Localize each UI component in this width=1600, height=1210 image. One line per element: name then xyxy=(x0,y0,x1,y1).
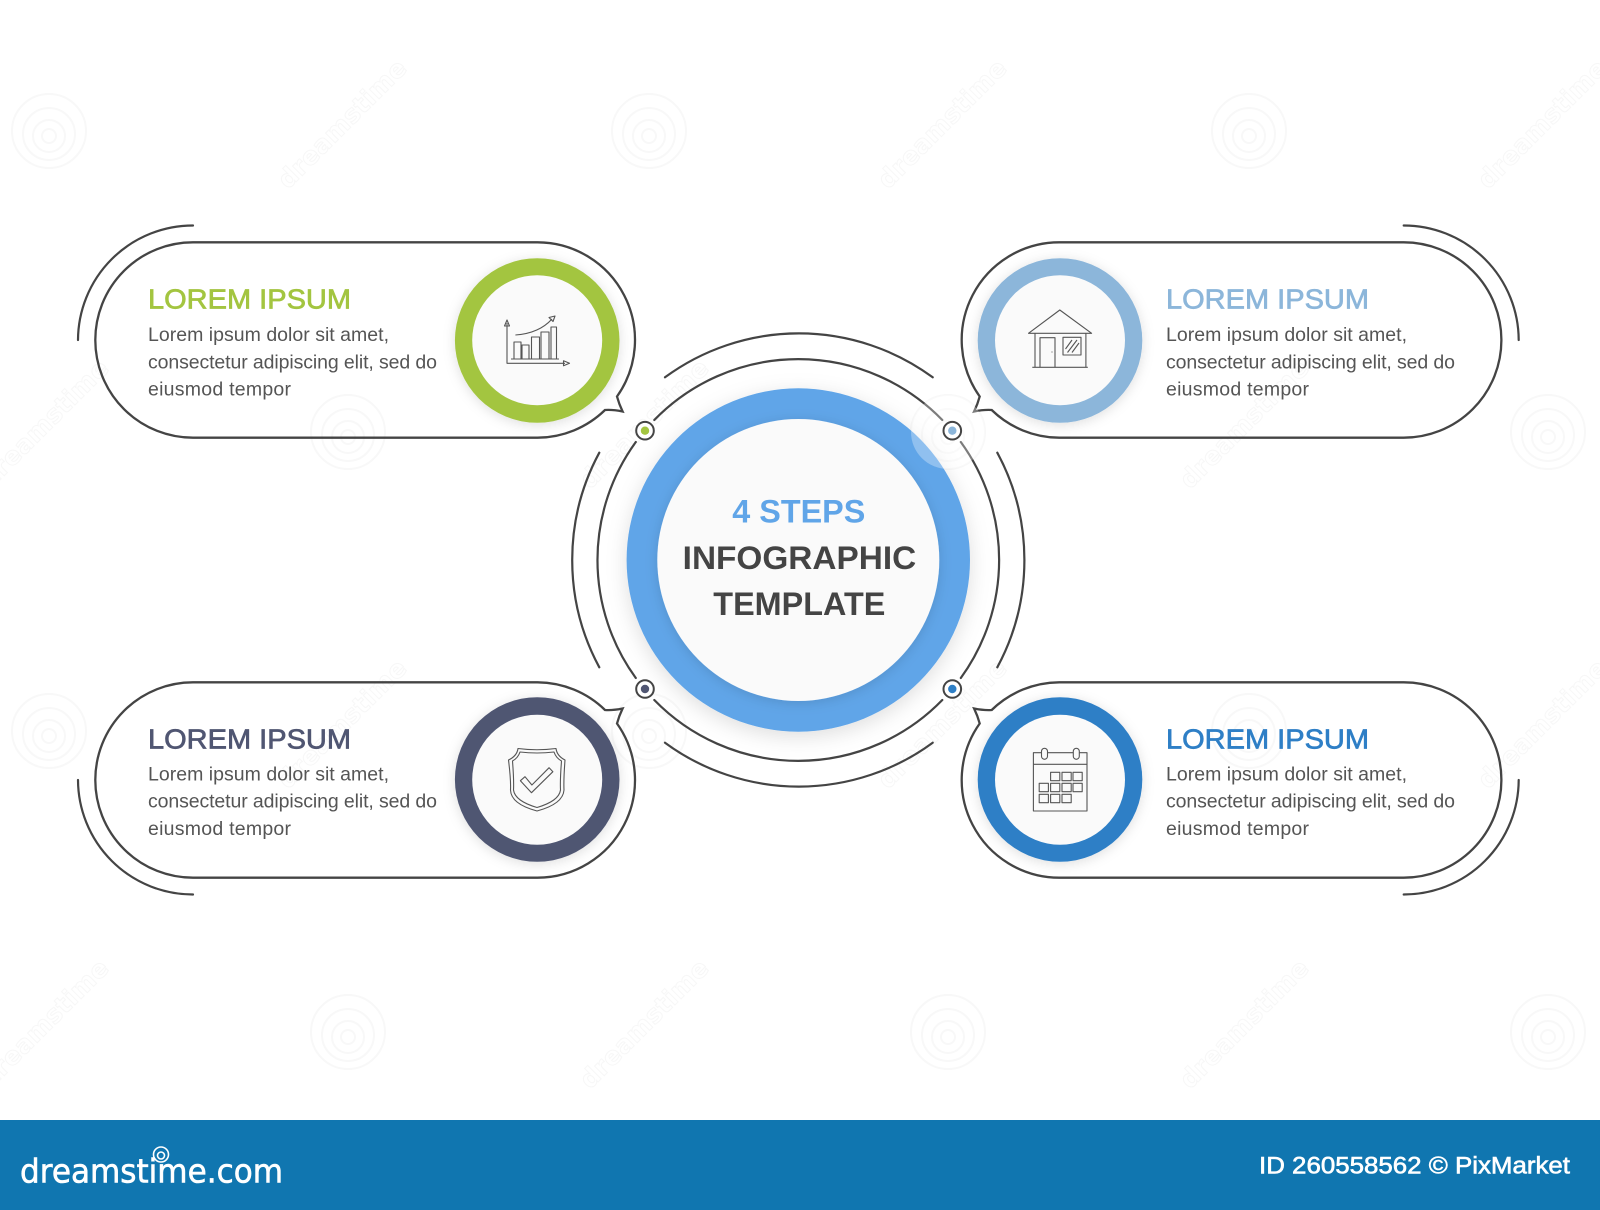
card outline top-left xyxy=(95,242,635,438)
center title: infographic: INFOGRAPHIC xyxy=(683,540,916,576)
node: green xyxy=(636,422,654,440)
panel: bottom-right step xyxy=(962,682,1519,894)
body text: Lorem ipsum dolor sit amet, xyxy=(1166,324,1407,346)
body text: consectetur adipiscing elit, sed do xyxy=(148,351,437,373)
body text: eiusmod tempor xyxy=(1166,818,1310,840)
body text: consectetur adipiscing elit, sed do xyxy=(1166,791,1455,813)
card outline bottom-right xyxy=(962,682,1501,878)
body text xyxy=(1166,763,1455,840)
center disc xyxy=(657,419,939,701)
inner disc xyxy=(472,715,602,845)
panel: bottom-left step xyxy=(78,682,635,894)
body text: consectetur adipiscing elit, sed do xyxy=(1166,351,1455,373)
body text: consectetur adipiscing elit, sed do xyxy=(148,791,437,813)
body text xyxy=(148,763,437,840)
outer broken ring xyxy=(572,333,1024,787)
outer arc bottom-left xyxy=(78,780,193,894)
inner disc xyxy=(995,275,1125,405)
logo text: dreamstime.com xyxy=(20,1152,283,1191)
node: dark xyxy=(636,680,654,698)
body text: Lorem ipsum dolor sit amet, xyxy=(148,763,389,785)
center title: 4 steps: 4 STEPS xyxy=(732,493,865,529)
heading: LOREM IPSUM xyxy=(148,723,351,754)
icon: shield with check xyxy=(508,748,565,811)
card outline bottom-left xyxy=(95,682,635,878)
body text xyxy=(1166,324,1455,401)
watermark pattern: dreamstime xyxy=(1174,954,1314,1094)
panel: center hub xyxy=(572,333,1024,787)
watermark pattern: dreamstime xyxy=(872,654,1012,794)
watermark pattern: dreamstime xyxy=(272,54,412,194)
icon: calendar xyxy=(1033,748,1087,811)
panel: top-right step xyxy=(962,226,1519,438)
node: light blue xyxy=(944,422,961,440)
panel: top-left step xyxy=(78,226,635,438)
heading: LOREM IPSUM xyxy=(1166,283,1369,314)
outer arc top-left xyxy=(78,226,193,340)
inner disc xyxy=(472,275,602,405)
watermark highlight xyxy=(911,395,985,469)
green ring xyxy=(455,258,620,423)
heading: LOREM IPSUM xyxy=(1166,723,1369,754)
outer arc top-right xyxy=(1404,226,1519,340)
center title: template: TEMPLATE xyxy=(713,586,885,622)
body text xyxy=(148,324,437,401)
watermark pattern: dreamstime xyxy=(1174,354,1314,494)
watermark pattern: dreamstime xyxy=(574,354,714,494)
body text: Lorem ipsum dolor sit amet, xyxy=(1166,763,1407,785)
card outline top-right xyxy=(962,242,1501,438)
inner broken ring xyxy=(597,359,999,761)
light blue ring xyxy=(978,258,1142,423)
icon: logo spiral xyxy=(154,1147,168,1162)
watermark pattern: dreamstime xyxy=(272,654,412,794)
watermark pattern: dreamstime xyxy=(574,954,714,1094)
body text: Lorem ipsum dolor sit amet, xyxy=(148,324,389,346)
inner disc xyxy=(995,715,1125,845)
body text: eiusmod tempor xyxy=(1166,379,1310,401)
body text: eiusmod tempor xyxy=(148,379,292,401)
blue ring xyxy=(978,697,1142,862)
node: blue xyxy=(944,680,961,698)
outer arc bottom-right xyxy=(1404,780,1519,894)
body text: eiusmod tempor xyxy=(148,818,292,840)
footer bar xyxy=(0,1120,1600,1210)
heading: LOREM IPSUM xyxy=(148,283,351,314)
icon: house xyxy=(1028,310,1092,367)
image credit: ID 260558562 © PixMarket xyxy=(1259,1152,1570,1179)
watermark pattern: dreamstime xyxy=(872,54,1012,194)
icon: growth chart xyxy=(504,316,570,366)
center blue ring xyxy=(627,388,970,732)
dark ring xyxy=(455,697,620,862)
